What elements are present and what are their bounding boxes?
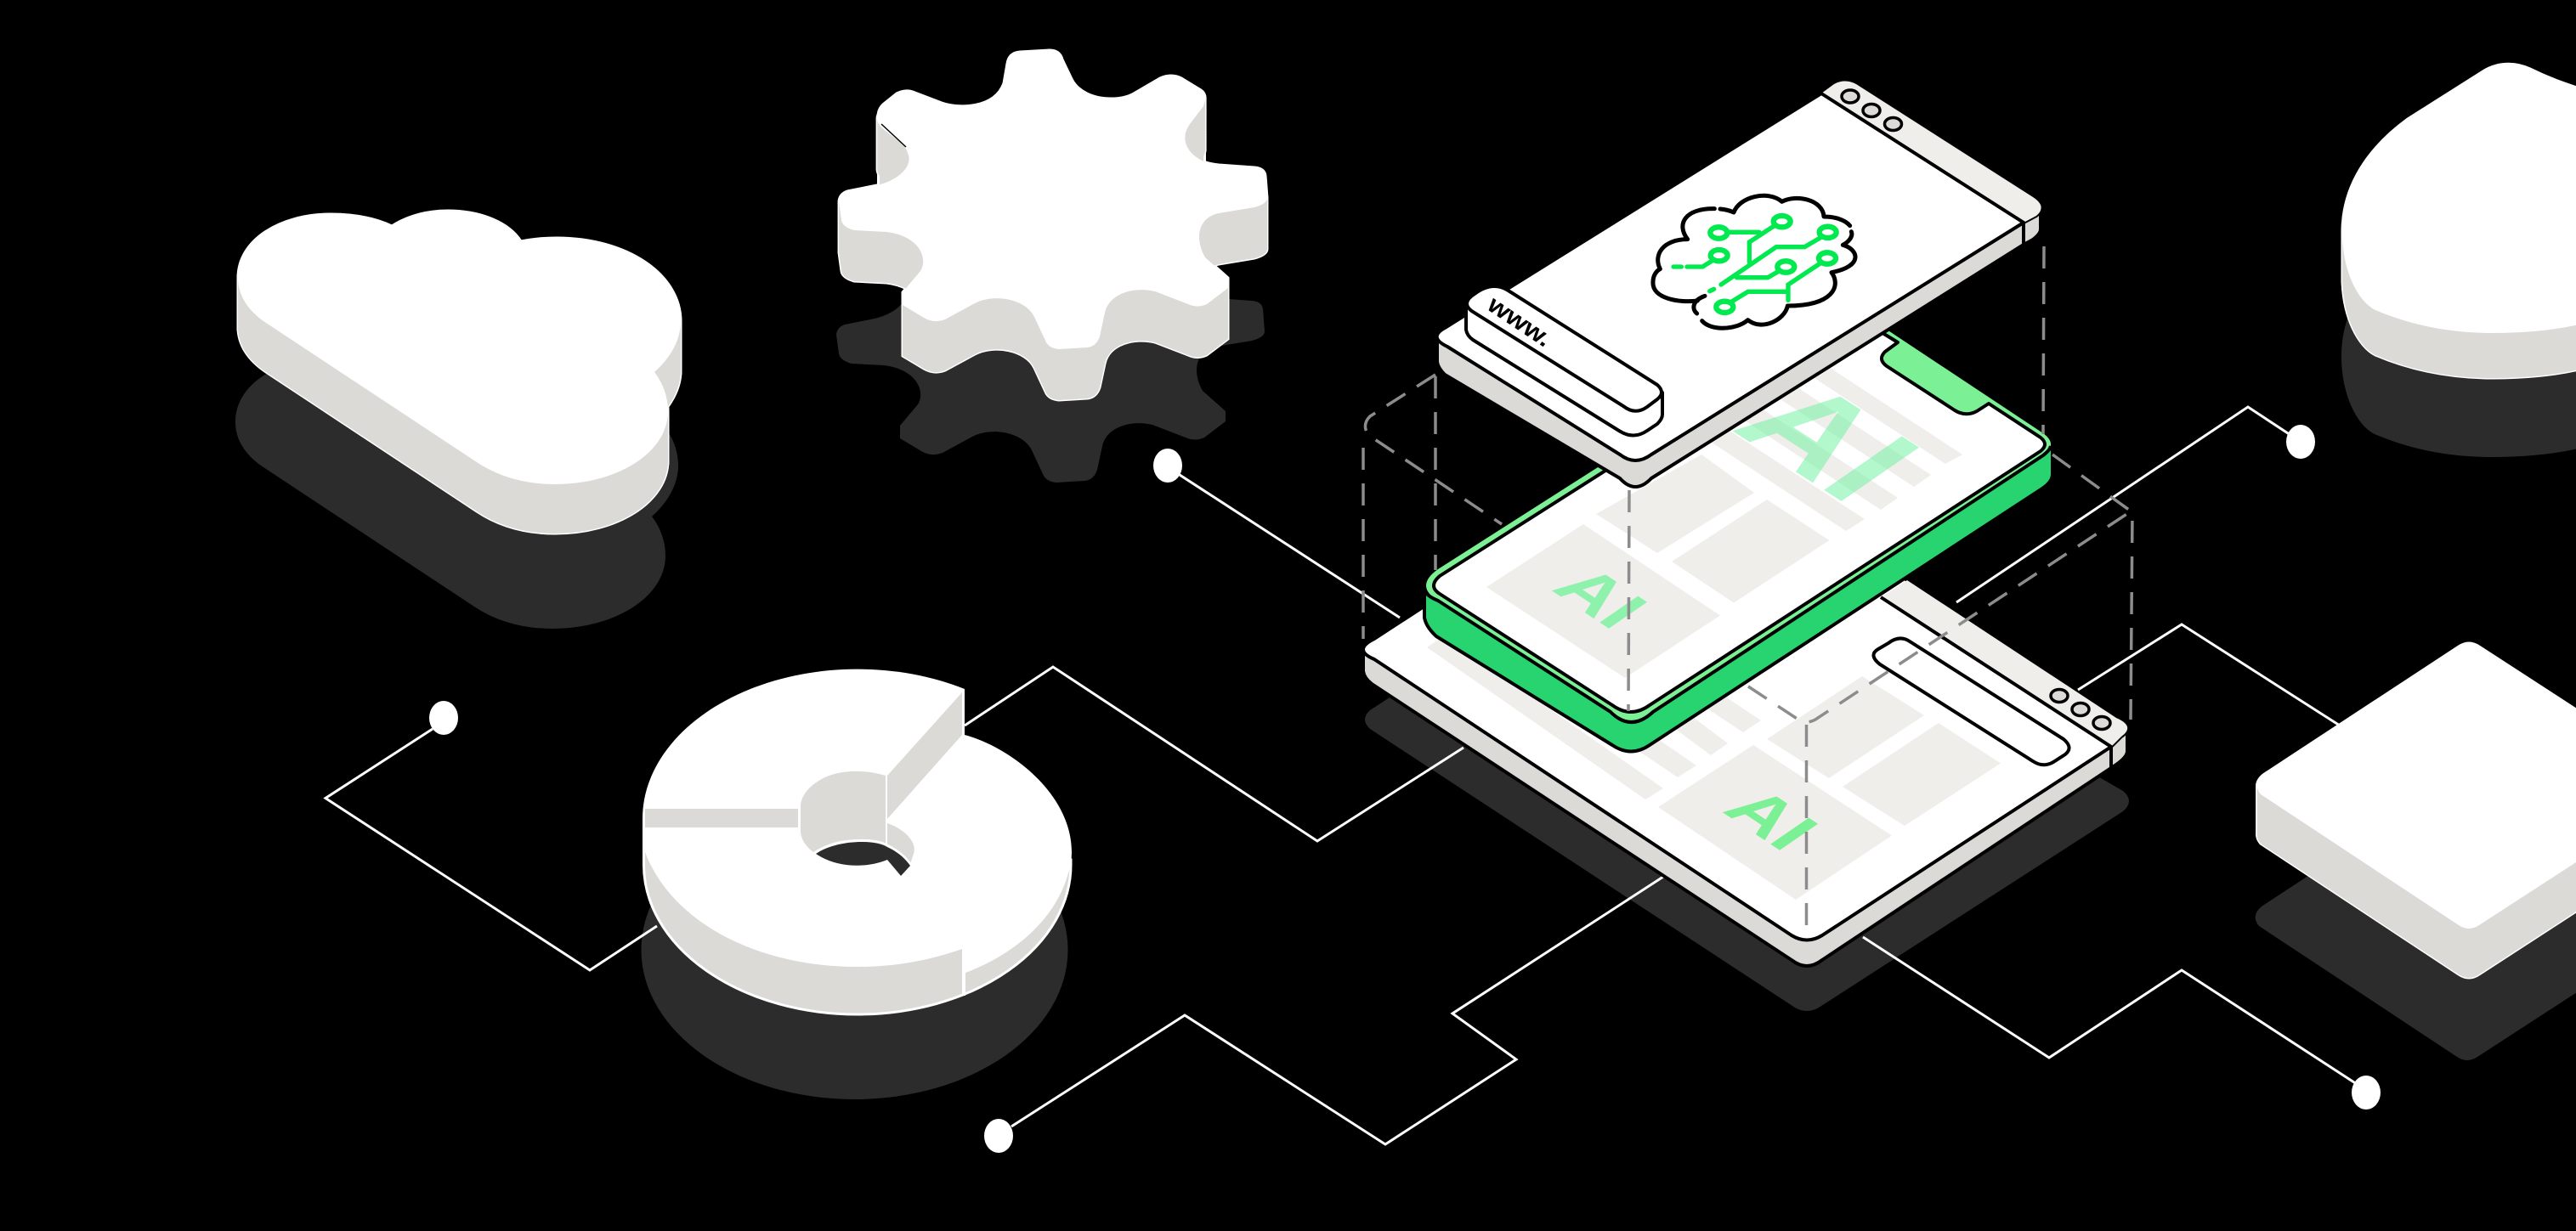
bottom panel side — [1363, 435, 2127, 966]
bottom panel AI label: AI — [1709, 776, 1834, 861]
dot: left — [429, 701, 458, 735]
donut hub inner wall right — [887, 823, 914, 864]
bottom panel top face — [1363, 435, 2127, 940]
circuit traces — [1673, 226, 1820, 303]
donut top surface — [643, 669, 1072, 973]
icon: AI brain circuit — [1653, 195, 1855, 328]
bottom panel window dots — [2051, 690, 2110, 729]
icon: shield — [2342, 64, 2576, 378]
donut hub wall — [801, 771, 886, 852]
bottom panel content blocks — [1427, 635, 2001, 900]
url bar top block — [1467, 286, 1662, 411]
dot: upper right — [2286, 425, 2315, 459]
panel: green middle page — [1424, 306, 2052, 751]
icon: cloud — [238, 211, 681, 534]
donut cut wall right — [887, 692, 962, 819]
shadows under all objects — [235, 184, 2576, 1099]
line: panels to upper right node — [1956, 407, 2290, 602]
line: bottom panel to box — [2078, 624, 2340, 726]
icon: gear — [839, 50, 1267, 400]
circuit nodes — [1710, 216, 1837, 313]
bottom panel header strip — [1881, 580, 2127, 747]
connector end dots — [429, 425, 2381, 1153]
dot: bottom — [984, 1119, 1013, 1153]
icon: donut chart — [643, 669, 1072, 1014]
connector lines — [326, 407, 2359, 1144]
top panel header strip — [1821, 82, 2041, 223]
dashed wireframe guides — [1363, 246, 2132, 936]
panel: top phone page — [1437, 82, 2041, 487]
line: donut to bottom panel — [965, 667, 1464, 841]
brain outline — [1653, 195, 1855, 328]
donut hole — [816, 842, 910, 876]
green panel white face — [1434, 314, 2045, 712]
icon: layered box — [2257, 643, 2576, 978]
top panel side — [1437, 207, 2041, 487]
green panel small AI label: AI — [1538, 555, 1663, 640]
panel: bottom browser page — [1363, 435, 2127, 966]
green panel side — [1424, 446, 2052, 751]
green panel rim — [1426, 306, 2051, 722]
top panel window dots — [1842, 90, 1902, 131]
dot: lower right — [2352, 1076, 2381, 1110]
green panel content blocks — [1486, 343, 1962, 678]
line: gear node to panels — [1177, 473, 1400, 618]
donut side wall — [644, 828, 1071, 1014]
bottom panel address bar — [1873, 638, 2069, 765]
donut slice step — [962, 949, 965, 996]
donut cut band left — [645, 809, 798, 827]
top panel face — [1437, 82, 2041, 460]
line: left node to donut — [326, 729, 657, 970]
dot: gear — [1153, 449, 1182, 483]
url bar lower block — [1466, 303, 1662, 435]
line: bottom node to bottom panel — [1011, 877, 1663, 1144]
line: bottom panel to lower right node — [1863, 937, 2359, 1086]
url text: www. — [1481, 291, 1557, 353]
green panel large AI label: AI — [1706, 359, 1951, 523]
